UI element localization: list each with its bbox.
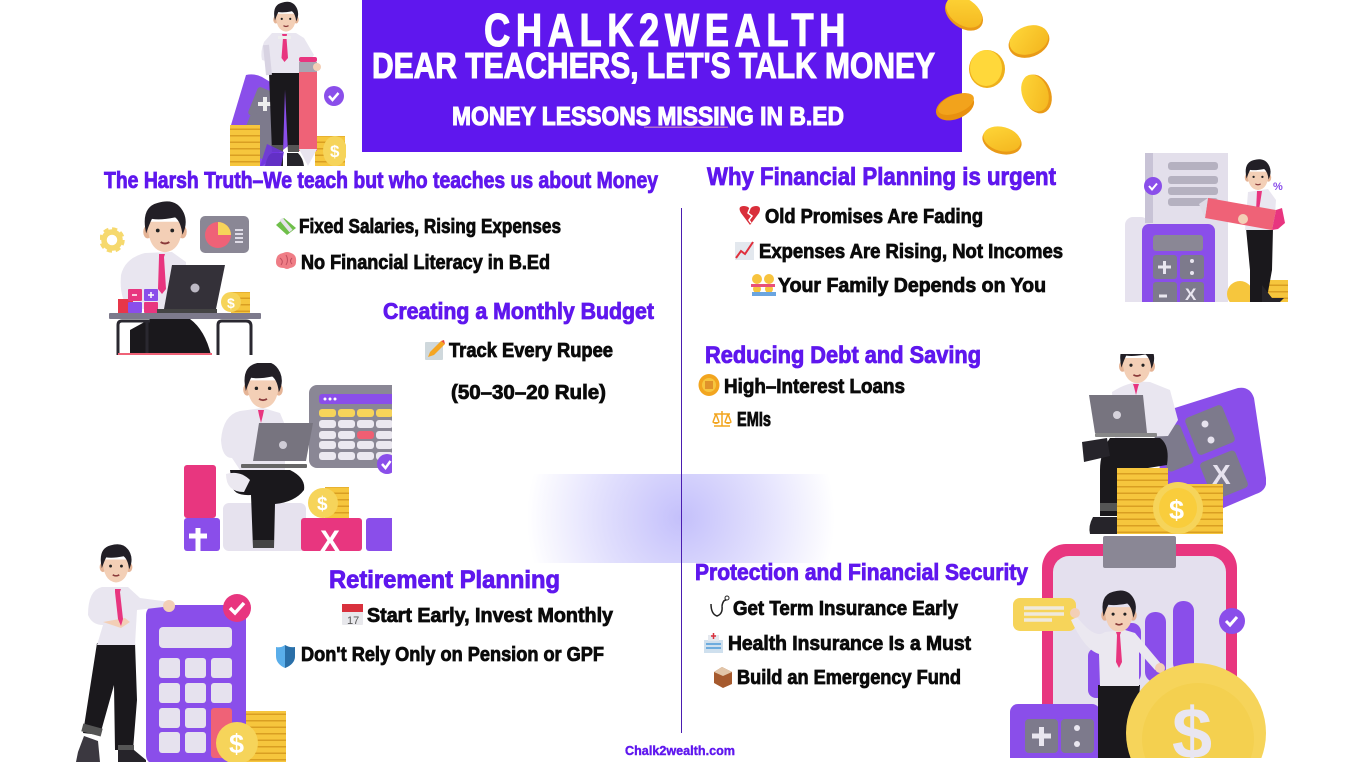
section: creating a monthly budget [383,298,654,404]
section: retirement planning [276,566,614,668]
bullet: emergency fund: Build an Emergency Fund [737,667,961,689]
bullet: EMIs [712,409,771,431]
bullet: term insurance: Get Term Insurance Early [733,598,959,620]
title banner [362,0,962,152]
falling gold coins [932,0,1057,159]
footer website: Chalk2wealth.com [625,743,735,758]
illustration: teacher with calendar: $ [317,494,328,515]
illustration: teacher with calendar: X [320,525,340,558]
section: reducing debt and saving [698,342,981,431]
bullet: 50-30-20 rule: (50–30–20 Rule) [451,382,606,404]
background glow [528,474,836,563]
illustration: teacher with receipt and pencil: X [1185,285,1197,304]
illustration: teacher with calculator: $ [229,729,244,759]
illustration: teacher with calculator [76,544,286,765]
bullet: family depends: Your Family Depends on You [778,275,1046,297]
title: brand: CHALK2WEALTH [484,4,851,56]
bullet: high interest loans: High–Interest Loans [724,376,905,398]
heading: retirement: Retirement Planning [329,566,560,594]
bullet: health insurance: Health Insurance Is a Must [728,633,971,655]
bullet: expenses rising: Expenses Are Rising, Not Incomes [759,241,1063,263]
bullet: EMIs: EMIs [737,409,771,431]
section: why financial planning is urgent [707,163,1063,297]
section: the harsh truth [104,167,658,274]
bullet: old promises: Old Promises Are Fading [765,206,983,228]
title: headline: DEAR TEACHERS, LET'S TALK MONEY [372,45,935,86]
heading: protection: Protection and Financial Security [695,559,1028,585]
illustration: teacher at desk: $ [227,295,235,311]
illustration: teacher with calendar [184,363,392,551]
heading: monthly budget: Creating a Monthly Budget [383,298,654,324]
bullet: track every rupee: Track Every Rupee [449,340,613,362]
subtitle: MONEY LESSONS MISSING IN B.ED [452,101,844,131]
heading: why urgent: Why Financial Planning is urgent [707,163,1057,191]
bullet: do not rely on pension: Don't Rely Only on Pension or GPF [301,644,604,666]
illustration: teacher with clipboard and big coin [1010,536,1266,768]
illustration: teacher with receipt and pencil [1125,153,1288,317]
bullet: fixed salaries: Fixed Salaries, Rising Expenses [299,216,561,238]
illustration: teacher with pencil [230,2,347,166]
heading: reducing debt: Reducing Debt and Saving [705,342,981,369]
bullet: start early: Start Early, Invest Monthly [367,605,614,627]
heading: harsh truth: The Harsh Truth–We teach but who teaches us about Money [104,167,658,193]
illustration: teacher with pencil: $ [330,142,340,161]
illustration: teacher with receipt and pencil: % [1273,181,1283,193]
bullet: start early: 17 [347,615,359,627]
illustration: teacher on coin stack: X [1212,459,1231,490]
illustration: teacher on coin stack: $ [1169,495,1184,525]
bullet: financial literacy: No Financial Literacy in B.Ed [301,252,550,274]
illustration: teacher at desk [101,201,261,355]
centre divider line [681,208,682,733]
illustration: teacher on coin stack [1082,341,1266,534]
section: protection and financial security [695,559,1028,689]
